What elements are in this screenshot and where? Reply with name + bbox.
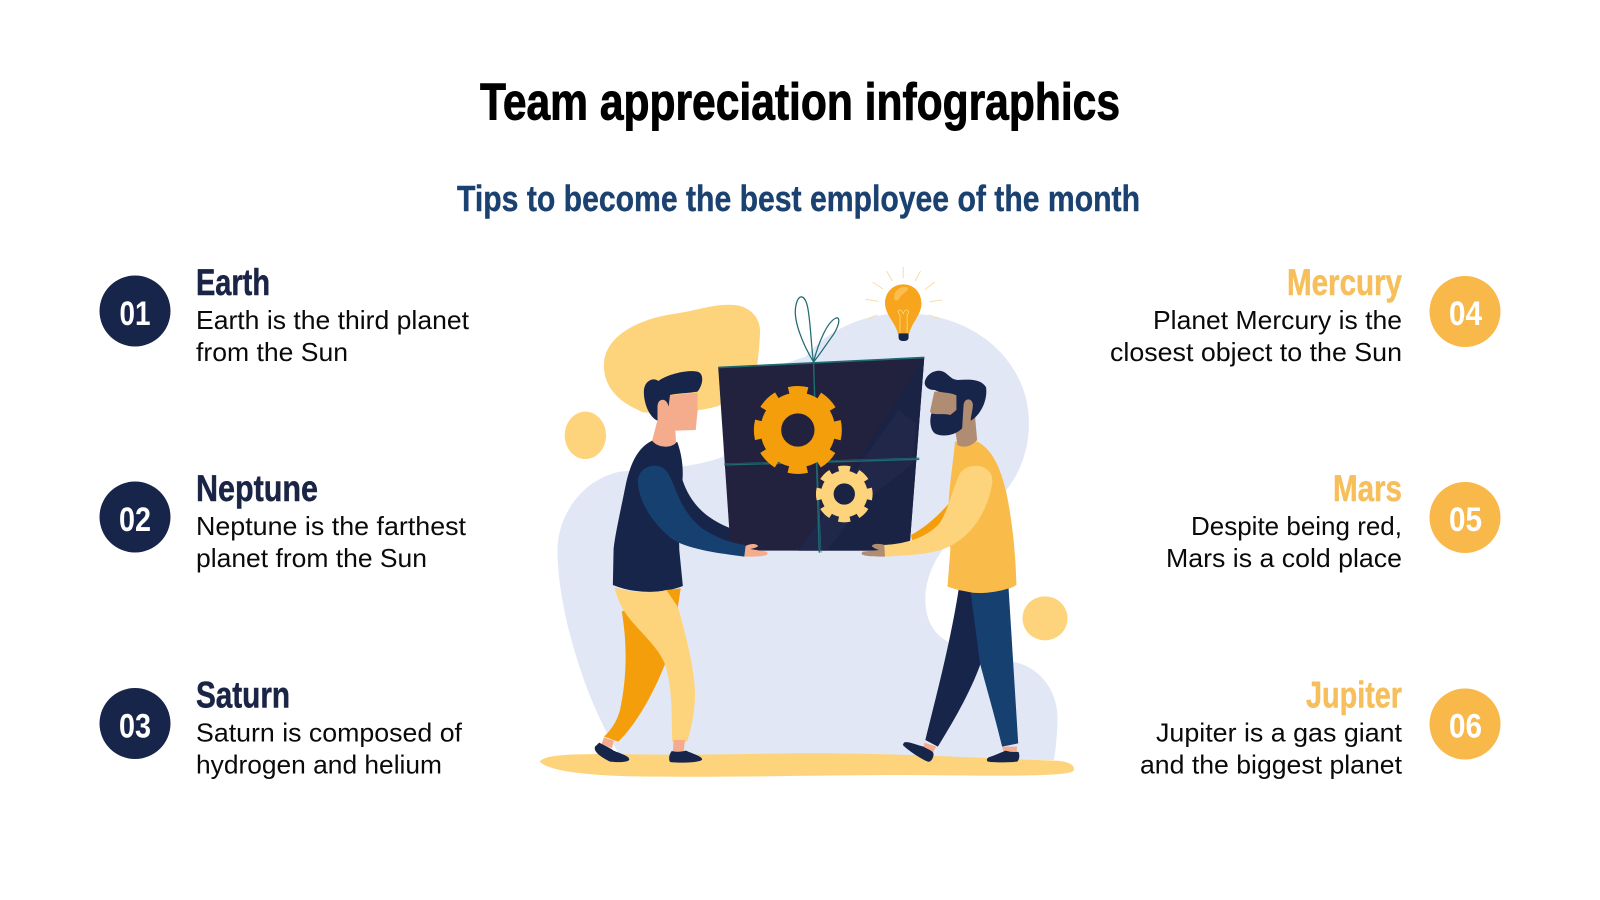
- item 04: Mercury: 04: [1449, 295, 1482, 333]
- item 03: Saturn: hydrogen and helium: [196, 750, 442, 780]
- illustration: two colleagues holding a gift box: [540, 267, 1074, 777]
- item 04: Mercury: closest object to the Sun: [1110, 337, 1402, 367]
- item 06: Jupiter: [1140, 674, 1500, 780]
- item 03: Saturn: Saturn is composed of: [196, 718, 463, 748]
- item 06: Jupiter: and the biggest planet: [1140, 750, 1403, 780]
- ground: [540, 753, 1074, 777]
- item 02: Neptune: planet from the Sun: [196, 543, 427, 573]
- man left: feet: [595, 737, 702, 763]
- item 01: Earth: Earth: [196, 262, 270, 303]
- man right: head: [925, 371, 986, 447]
- man left: legs: [604, 587, 695, 742]
- item 03: Saturn: 03: [119, 708, 151, 746]
- yellow blob: [604, 305, 760, 413]
- item 02: Neptune: Neptune is the farthest: [196, 511, 467, 541]
- item 06: Jupiter: Jupiter is a gas giant: [1156, 718, 1403, 748]
- item 01: Earth: 01: [120, 295, 150, 333]
- item 01: Earth: [100, 262, 470, 367]
- item 05: Mars: [1166, 468, 1500, 573]
- item 05: Mars: Despite being red,: [1191, 511, 1402, 541]
- man right: feet: [903, 742, 1019, 762]
- title: Team appreciation infographics: [480, 74, 1120, 132]
- item 03: Saturn: [100, 674, 463, 780]
- item 02: Neptune: 02: [119, 501, 151, 539]
- small yellow blob right: [1022, 596, 1067, 640]
- item 02: Neptune: [100, 468, 467, 573]
- lightbulb: [866, 267, 942, 341]
- item 03: Saturn: Saturn: [196, 674, 290, 716]
- man left: back arm and torso: [613, 441, 731, 592]
- man left: head: [644, 371, 702, 447]
- small yellow blob left: [565, 412, 606, 459]
- large orange gear: [759, 391, 837, 469]
- ribbon bow loops: [795, 297, 839, 362]
- item 01: Earth: Earth is the third planet: [196, 305, 470, 335]
- subtitle: Tips to become the best employee of the month: [457, 178, 1140, 219]
- item 05: Mars: Mars is a cold place: [1166, 543, 1402, 573]
- man right: back arm, torso: [911, 442, 1016, 593]
- man left: front arm and hand: [638, 466, 768, 557]
- item 02: Neptune: Neptune: [196, 468, 318, 509]
- item 05: Mars: Mars: [1333, 468, 1402, 509]
- item 05: Mars: 05: [1449, 501, 1482, 539]
- pale blue background blob: [557, 313, 1057, 760]
- item 04: Mercury: [1110, 262, 1500, 367]
- gift box: [718, 357, 924, 553]
- item 06: Jupiter: Jupiter: [1306, 674, 1402, 716]
- small yellow gear: [820, 469, 869, 519]
- item 04: Mercury: Mercury: [1287, 262, 1402, 303]
- item 06: Jupiter: 06: [1449, 708, 1482, 746]
- man right: front arm and hand: [862, 466, 992, 557]
- item 04: Mercury: Planet Mercury is the: [1153, 305, 1402, 335]
- item 01: Earth: from the Sun: [196, 337, 348, 367]
- man right: legs: [925, 588, 1018, 747]
